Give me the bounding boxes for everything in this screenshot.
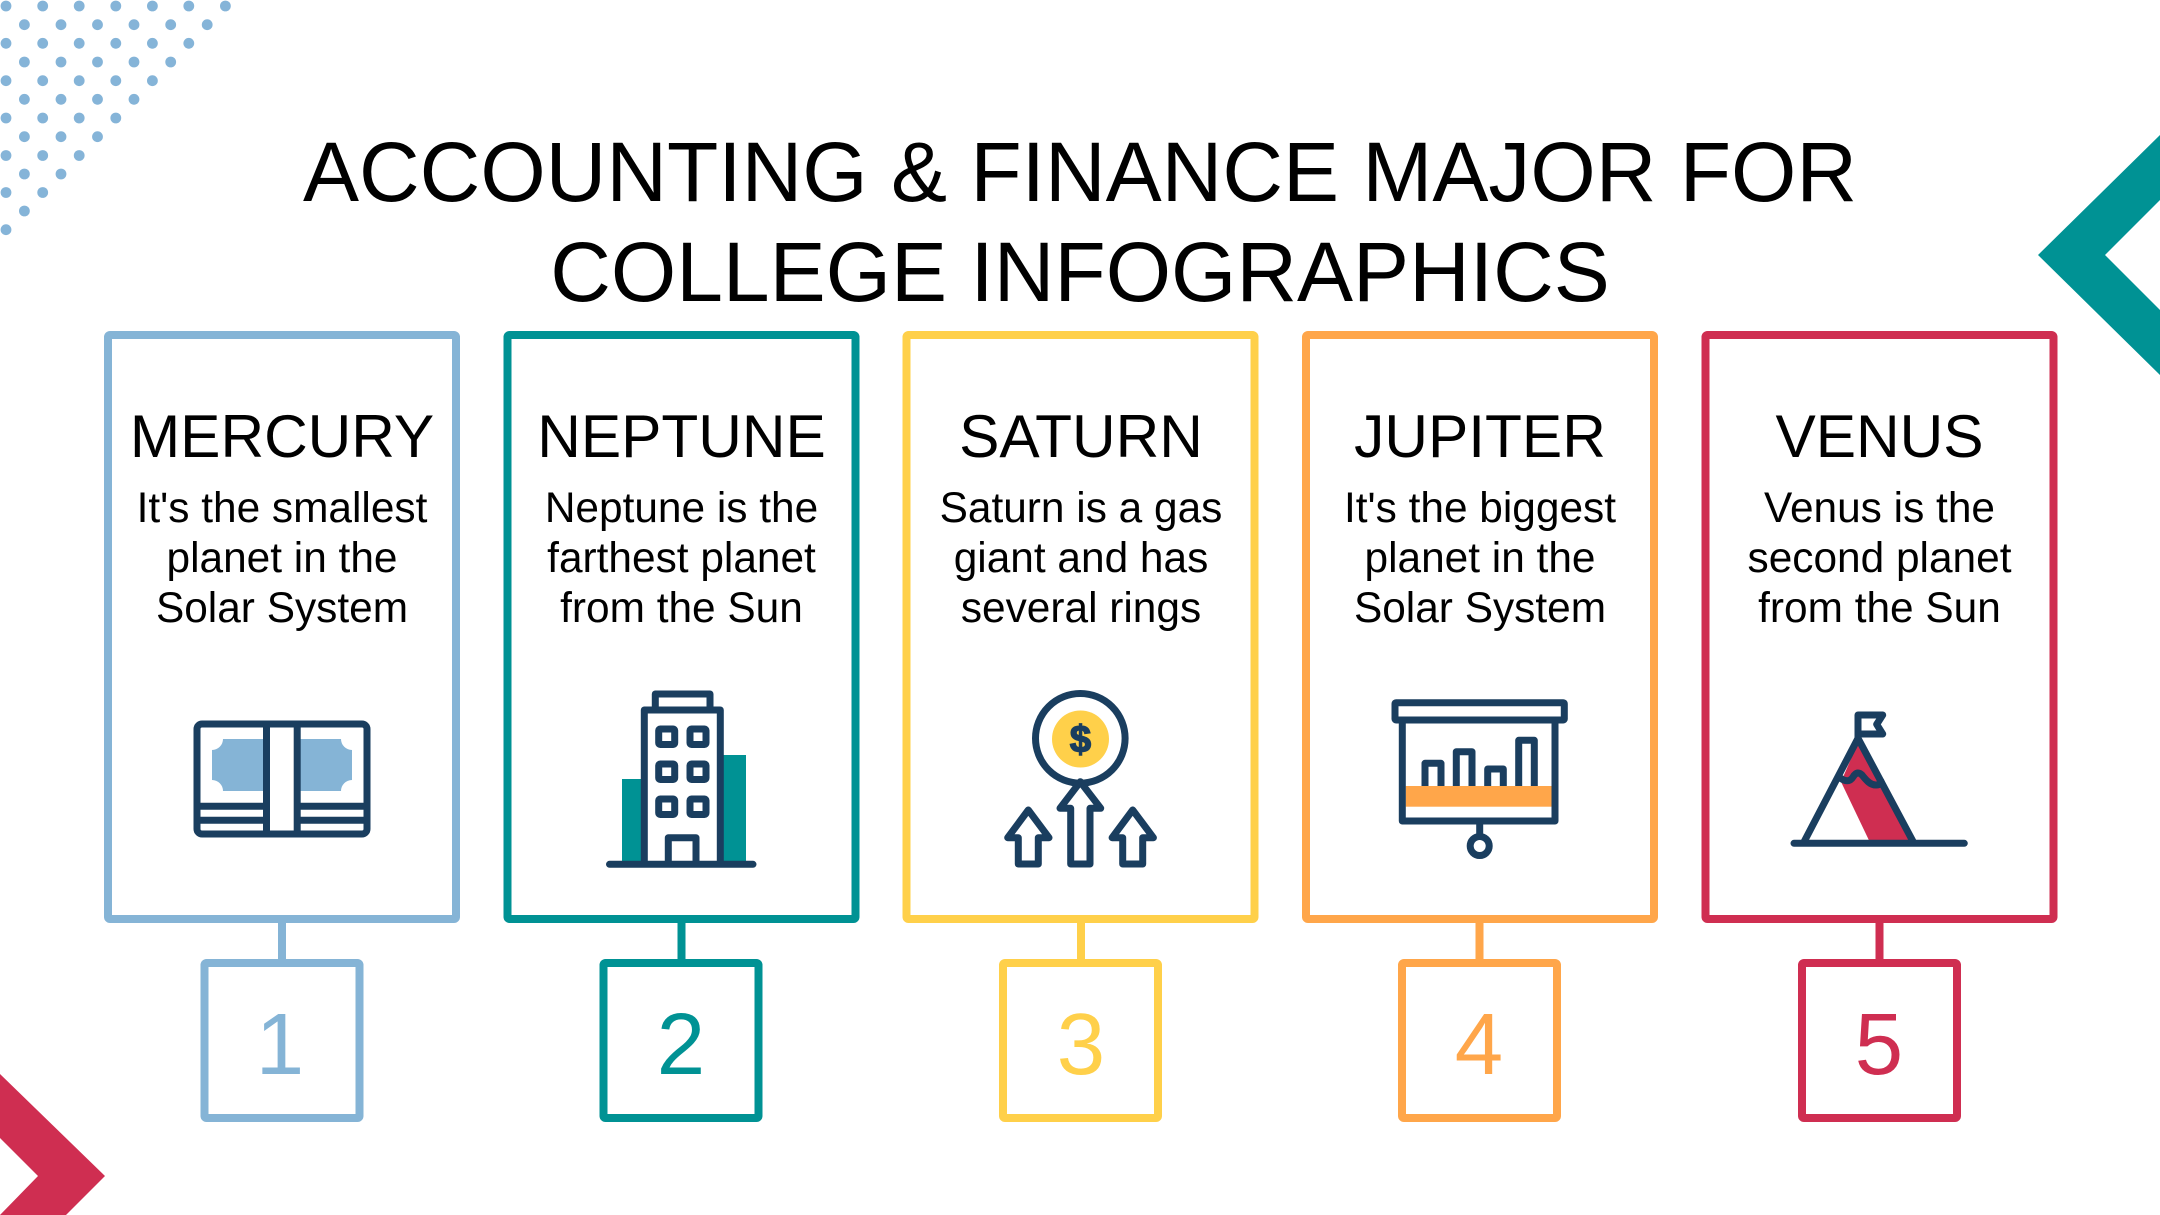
text: Venus description: second planet: [1748, 534, 2012, 581]
connector: Saturn: [1077, 923, 1085, 959]
text: Neptune description: Neptune is the: [545, 484, 818, 531]
panel: Neptune: [508, 335, 856, 919]
icon: banknote bundle: [197, 724, 367, 834]
text: Jupiter description: Solar System: [1354, 584, 1606, 631]
text: Mercury description: [137, 484, 428, 631]
panel: Venus: [1706, 335, 2054, 919]
text: Saturn description: giant and has: [954, 534, 1208, 581]
teal chevron top right: [2038, 135, 2160, 375]
text: Venus description: from the Sun: [1758, 584, 2001, 631]
heading: Jupiter: JUPITER: [1354, 402, 1606, 470]
number box 3: [1003, 963, 1158, 1118]
text: Neptune description: [545, 484, 818, 631]
text: Mercury description: It's the smallest: [137, 484, 428, 531]
number box 1: [204, 963, 360, 1118]
connector: Neptune: [678, 923, 686, 959]
text: Mercury description: Solar System: [156, 584, 408, 631]
number box 4: [1402, 963, 1557, 1118]
number box 2: [604, 963, 758, 1118]
number box 5: [1802, 963, 1957, 1118]
text: Jupiter description: planet in the: [1365, 534, 1595, 581]
number box 5: 5: [1855, 996, 1903, 1093]
icon: mountain with flag: [1794, 715, 1964, 843]
title: COLLEGE INFOGRAPHICS: [550, 225, 1610, 319]
title: [303, 125, 1857, 319]
title: ACCOUNTING & FINANCE MAJOR FOR: [303, 125, 1857, 219]
connector: Mercury: [278, 923, 286, 959]
text: Mercury description: planet in the: [167, 534, 397, 581]
text: Saturn description: [940, 484, 1222, 631]
icon: office building: [610, 694, 753, 864]
number box 2: 2: [657, 996, 705, 1093]
heading: Saturn: SATURN: [959, 402, 1203, 470]
icon: dollar coin with rising arrows: [1008, 694, 1153, 864]
text: Neptune description: from the Sun: [560, 584, 803, 631]
icon: projector screen chart: [1395, 703, 1564, 856]
heading: Neptune: NEPTUNE: [537, 402, 826, 470]
panel: Mercury: [108, 335, 456, 919]
number box 1: 1: [256, 996, 304, 1093]
icon: dollar coin with rising arrows: $: [1070, 719, 1091, 761]
panel: Jupiter: [1306, 335, 1654, 919]
heading: Venus: VENUS: [1775, 402, 1984, 470]
text: Venus description: Venus is the: [1764, 484, 1995, 531]
text: Jupiter description: [1344, 484, 1616, 631]
text: Neptune description: farthest planet: [547, 534, 816, 581]
text: Saturn description: several rings: [961, 584, 1201, 631]
number box 4: 4: [1455, 996, 1503, 1093]
heading: Mercury: MERCURY: [130, 402, 434, 470]
red chevron bottom left: [0, 1074, 105, 1215]
panel: Saturn: [906, 335, 1254, 919]
text: Jupiter description: It's the biggest: [1344, 484, 1616, 531]
text: Saturn description: Saturn is a gas: [940, 484, 1222, 531]
decorative dot pattern top left: [1, 1, 231, 235]
connector: Venus: [1876, 923, 1884, 959]
text: Venus description: [1748, 484, 2012, 631]
connector: Jupiter: [1476, 923, 1484, 959]
number box 3: 3: [1057, 996, 1105, 1093]
